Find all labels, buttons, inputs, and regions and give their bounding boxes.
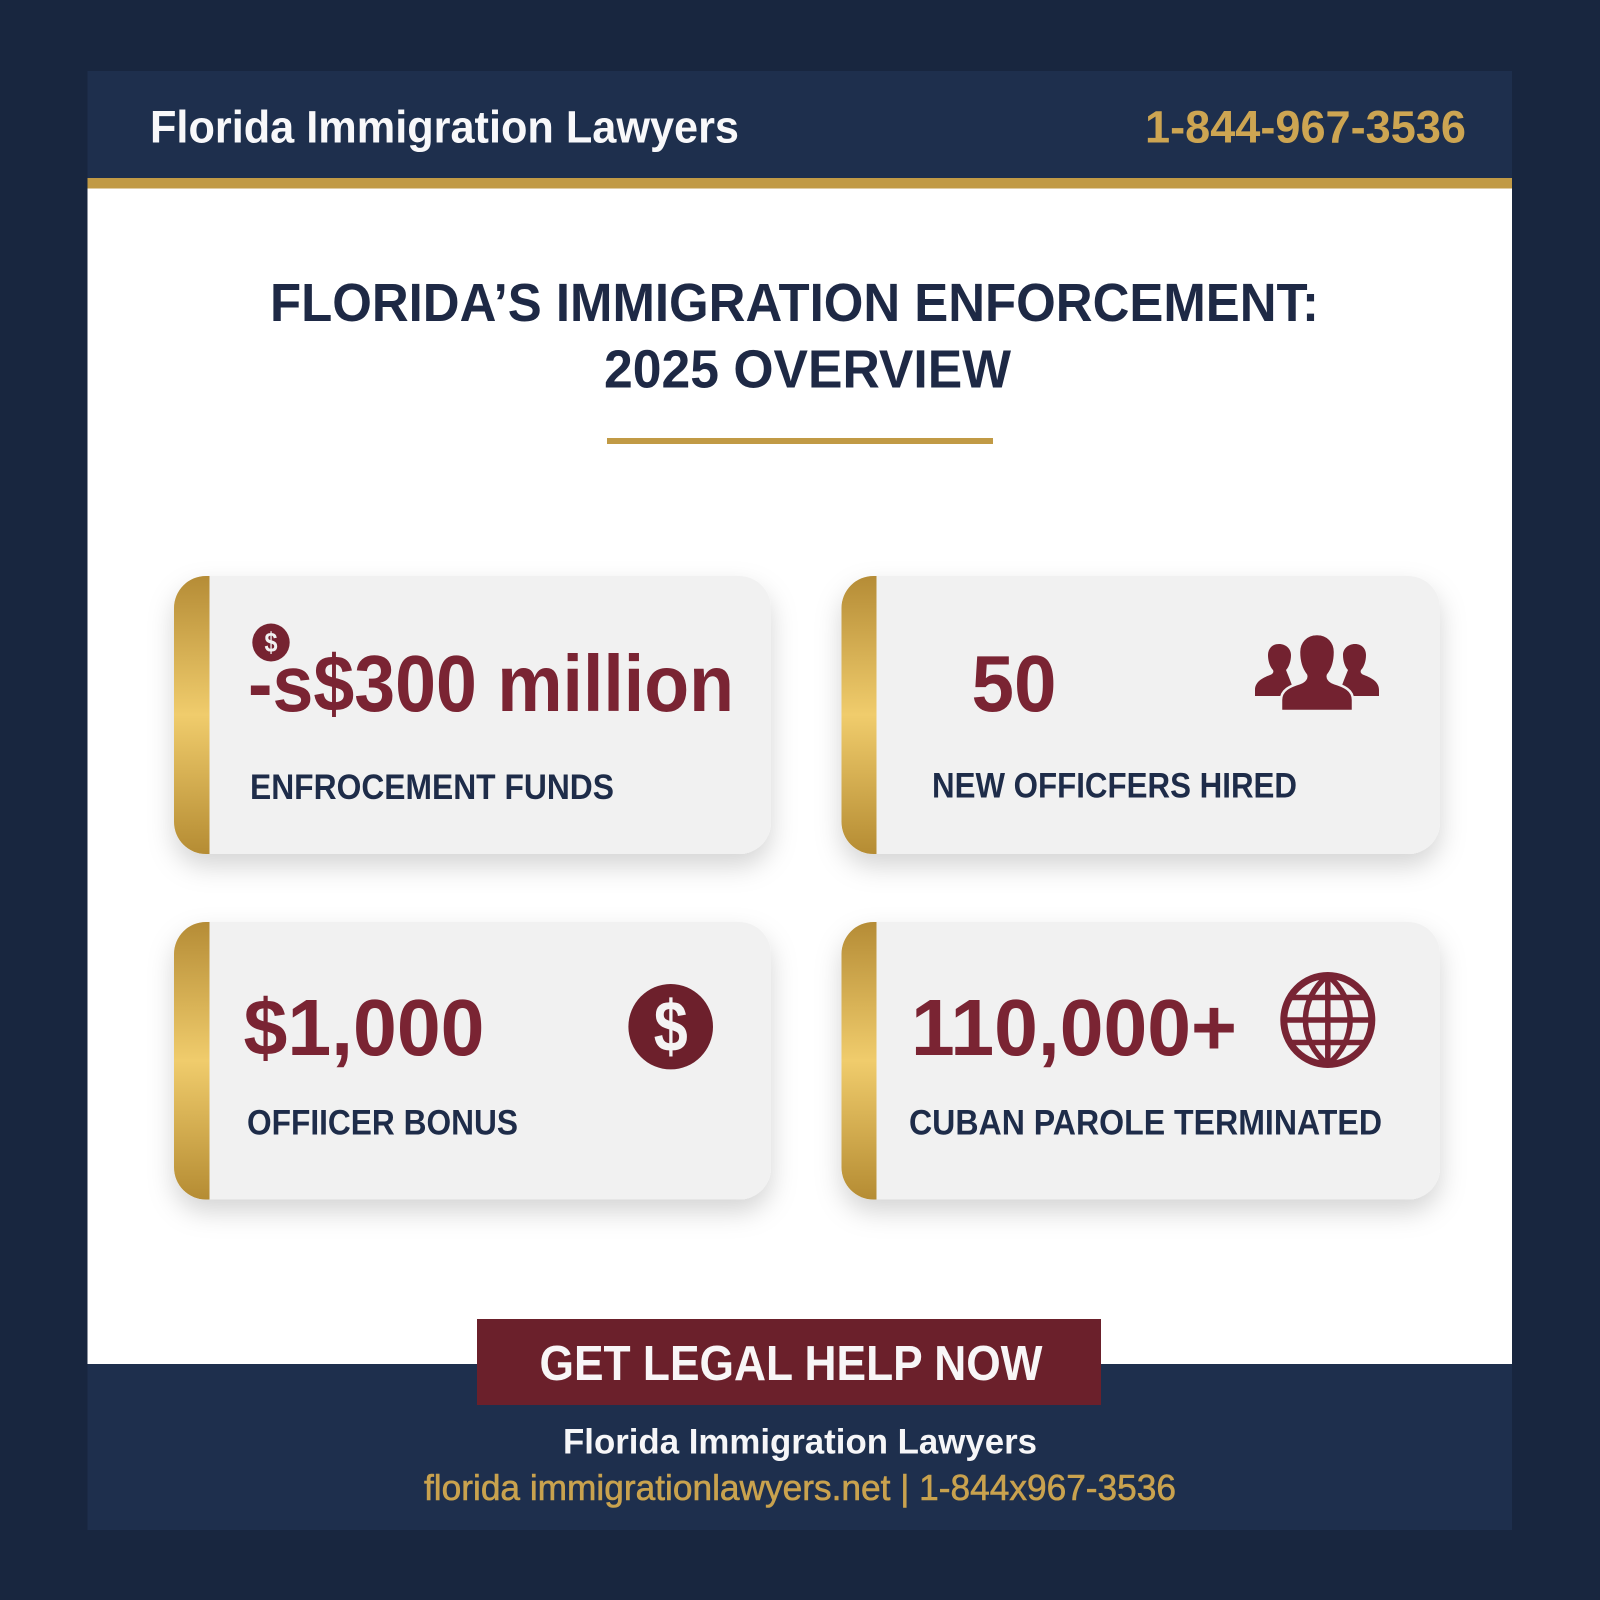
call to action button bbox=[477, 1319, 1101, 1405]
call to action button: GET LEGAL HELP NOW bbox=[540, 1337, 1043, 1391]
stat: 50: 50 bbox=[972, 639, 1056, 728]
panel: officer bonus bbox=[174, 922, 771, 1200]
icon: globe bbox=[1284, 975, 1372, 1065]
icon: dollar coin: $ bbox=[654, 987, 688, 1067]
icon: small dollar coin: $ bbox=[264, 627, 278, 658]
title bbox=[270, 273, 1319, 400]
label: enforcement funds: ENFROCEMENT FUNDS bbox=[250, 768, 614, 807]
header bar bbox=[88, 71, 1512, 188]
icon: dollar coin bbox=[628, 984, 713, 1069]
stat: 110,000+: 110,000+ bbox=[911, 983, 1237, 1072]
label: cuban parole terminated: CUBAN PAROLE TERMINATED bbox=[909, 1104, 1382, 1142]
label: officer bonus: OFFIICER BONUS bbox=[247, 1104, 518, 1142]
title underline bbox=[607, 438, 993, 444]
stat: $300 million: -s$300 million bbox=[248, 639, 734, 728]
header phone number: 1-844-967-3536 bbox=[1145, 102, 1466, 152]
footer website and phone: florida immigrationlawyers.net | 1-844x967-3536 bbox=[424, 1467, 1176, 1508]
panel: cuban parole bbox=[842, 922, 1440, 1200]
title: 2025 OVERVIEW bbox=[604, 340, 1011, 400]
footer bar bbox=[88, 1364, 1512, 1530]
icon: small dollar coin bbox=[252, 624, 290, 662]
stat: $1,000: $1,000 bbox=[244, 983, 484, 1072]
label: new officers hired: NEW OFFICFERS HIRED bbox=[932, 766, 1297, 806]
icon: group of people bbox=[1255, 634, 1379, 711]
title: FLORIDA’S IMMIGRATION ENFORCEMENT: bbox=[270, 273, 1319, 333]
panel: new officers bbox=[842, 576, 1440, 854]
header firm name: Florida Immigration Lawyers bbox=[150, 102, 739, 152]
panel: enforcement funds bbox=[174, 576, 771, 854]
footer firm name: Florida Immigration Lawyers bbox=[563, 1422, 1037, 1462]
